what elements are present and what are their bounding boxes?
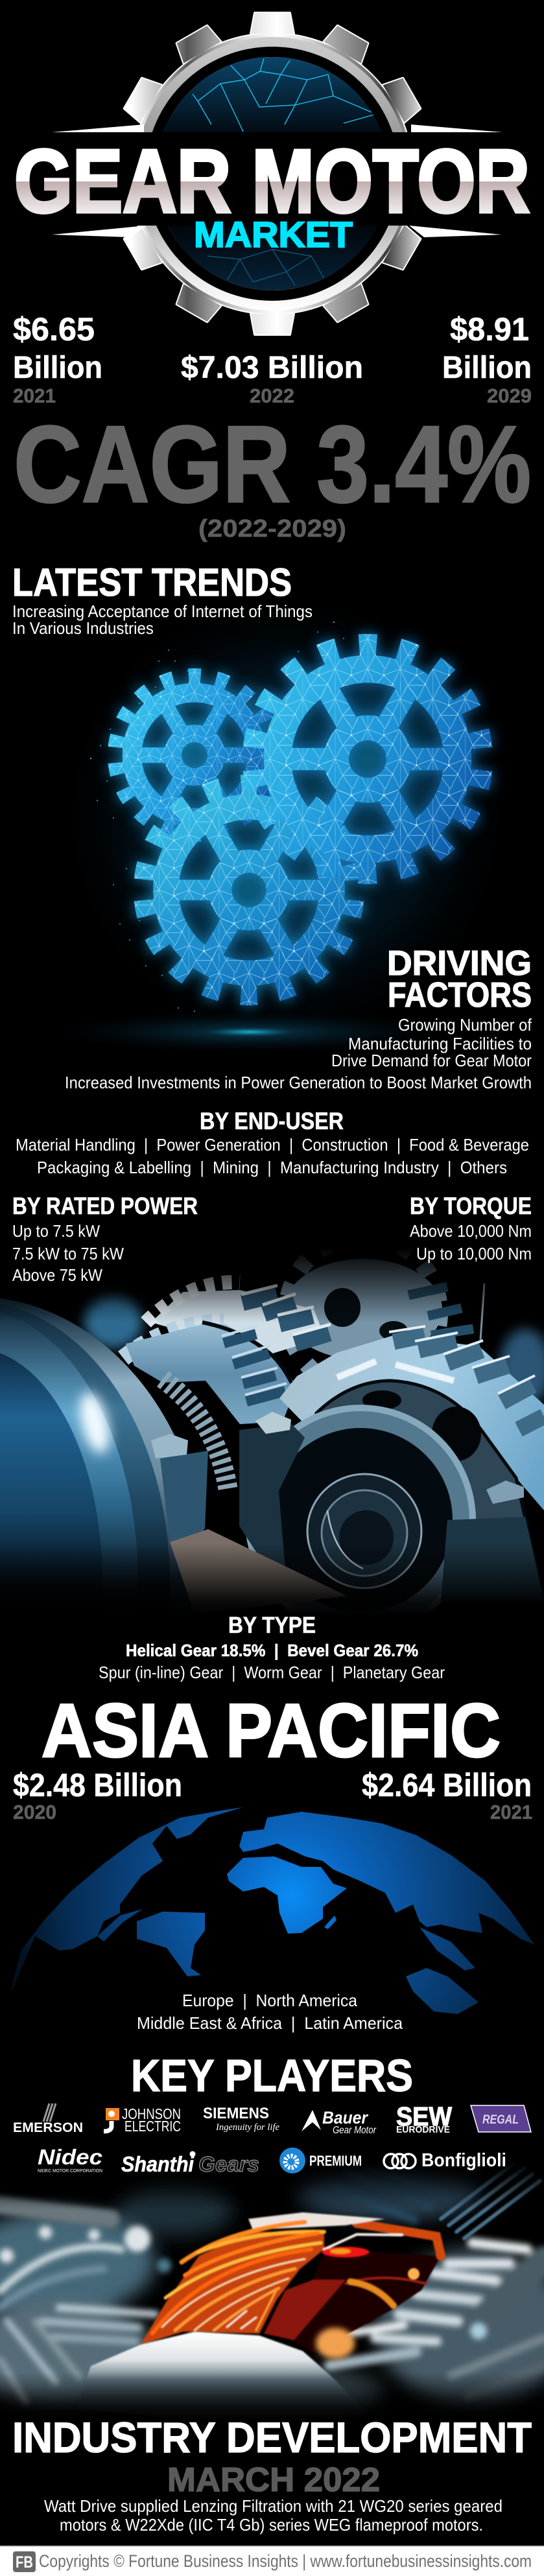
list: leading gear types: Helical Gear 18.5% | Bevel Gear 26.7% (126, 1641, 418, 1660)
logo: Johnson Electric: JOHNSON (122, 2105, 181, 2122)
logo: Nidec: Nidec (38, 2145, 102, 2169)
list: other gear types: Spur (in-line) Gear | Worm Gear | Planetary Gear (99, 1663, 445, 1682)
text: development detail: motors & W22Xde (IIC T4 Gb) series WEG flameproof motors. (60, 2515, 483, 2535)
logo: Shanthi Gears: Gears (198, 2152, 259, 2176)
heading: By Type: BY TYPE (228, 1613, 316, 1638)
list: rated power segments: Up to 7.5 kW (12, 1221, 100, 1241)
stat: Asia Pacific 2020: $2.48 Billion (13, 1767, 182, 1803)
list: torque segments: Up to 10,000 Nm (416, 1244, 532, 1263)
logo: Johnson Electric: ELECTRIC (124, 2118, 181, 2135)
main gear band and teeth (279, 1325, 544, 1567)
list: other regions: Europe | North America (182, 1991, 358, 2010)
motor housing highlight (87, 2331, 348, 2413)
back row of mid gear teeth (146, 1282, 331, 1355)
list: rated power segments: Above 75 kW (12, 1265, 102, 1285)
heading: Asia Pacific: ASIA PACIFIC (41, 1688, 501, 1773)
gear large (253, 644, 482, 874)
heading: By Rated Power: BY RATED POWER (12, 1193, 198, 1219)
logo: Johnson Electric (104, 2105, 181, 2135)
subtitle: Market: MARKET (194, 214, 353, 255)
heading: Latest Trends: LATEST TRENDS (12, 561, 292, 604)
text: latest trends detail (12, 602, 313, 638)
list: end-user segments: Packaging & Labelling | Mining | Manufacturing Industry | Others (37, 1158, 507, 1177)
stat: 2021 value: $6.65 (13, 311, 95, 347)
floor light (55, 1011, 444, 1053)
logo: Premium (279, 2148, 362, 2173)
gear bottom (143, 784, 355, 996)
logo: Regal: REGAL (482, 2113, 519, 2127)
housing and bearing (239, 1405, 543, 1609)
stat: 2022 value: $7.03 Billion (181, 351, 363, 385)
front mid gear (123, 1322, 297, 1424)
coil windings (141, 2212, 441, 2353)
map: globe (10, 1807, 534, 2014)
rear gear (280, 1252, 485, 1373)
logo: Regal (471, 2105, 531, 2132)
logo: Emerson: EMERSON (13, 2120, 83, 2135)
stat: Asia Pacific 2021 (362, 1767, 532, 1823)
blurred background (84, 1296, 544, 1407)
heading: Driving Factors: DRIVING (387, 944, 532, 983)
logo: Bauer Gear Motor: Gear Motor (333, 2125, 377, 2136)
stat: Asia Pacific 2020: 2020 (13, 1801, 56, 1823)
logo: Siemens: SIEMENS (203, 2105, 269, 2122)
list: rated power segments (12, 1221, 124, 1285)
list: other regions (137, 1991, 403, 2033)
stat: 2022 value: 2022 (250, 384, 294, 407)
text: latest trends detail: In Various Industries (12, 618, 154, 638)
CAGR period: (2022-2029) (198, 515, 346, 543)
stat: 2021 value: Billion (13, 351, 102, 385)
text: driving factors detail: Manufacturing Facilities to (348, 1034, 532, 1053)
logo: Shanthi Gears: Shanthi (121, 2152, 195, 2176)
text: driving factors detail: Growing Number of (398, 1015, 532, 1035)
illustration: glowing low-poly gears (55, 596, 506, 1053)
pinion (163, 1379, 228, 1491)
heading: By End-User: BY END-USER (200, 1108, 344, 1134)
stat: 2021 value: 2021 (13, 384, 56, 407)
heading: Driving Factors (387, 944, 532, 1014)
gear small (115, 675, 274, 835)
logo: Bonfiglioli: Bonfiglioli (421, 2150, 506, 2171)
logo emblem: metallic gear (52, 12, 502, 336)
list: torque segments: Above 10,000 Nm (410, 1221, 532, 1241)
text: latest trends detail: Increasing Acceptance of Internet of Things (12, 602, 313, 621)
logo: Siemens: Ingenuity for life (215, 2122, 279, 2133)
drum (0, 1298, 204, 1595)
list: torque segments (410, 1221, 532, 1263)
logo: Premium: PREMIUM (309, 2153, 362, 2169)
logo: Bauer Gear Motor: Bauer (322, 2108, 368, 2127)
stat: 2022 value (181, 351, 363, 407)
stat: Asia Pacific 2020 (13, 1767, 182, 1823)
stat: 2029 value: Billion (442, 351, 532, 385)
image: machinery gears (0, 1252, 544, 1609)
stat: 2029 value: 2029 (487, 384, 532, 407)
stat: 2021 value (13, 311, 102, 407)
logo: Shanthi Gears (121, 2151, 259, 2176)
logo: SEW Eurodrive: SEW (396, 2102, 452, 2131)
stat: 2029 value (442, 311, 532, 407)
text: development detail (44, 2496, 503, 2535)
date: March 2022: MARCH 2022 (167, 2461, 380, 2499)
list: rated power segments: 7.5 kW to 75 kW (12, 1244, 124, 1263)
logo: Siemens (203, 2105, 279, 2133)
heading: Key Players: KEY PLAYERS (131, 2050, 413, 2101)
logo: Emerson (13, 2103, 83, 2135)
footer logo: FB (16, 2553, 33, 2571)
logo: Bauer Gear Motor (302, 2108, 377, 2136)
list: end-user segments (16, 1135, 529, 1177)
block and beam (151, 1434, 347, 1614)
logo: Bonfiglioli (384, 2150, 506, 2171)
list: other regions: Middle East & Africa | Latin America (137, 2013, 403, 2033)
image: hot motor coil (0, 2161, 544, 2421)
text: development detail: Watt Drive supplied Lenzing Filtration with 21 WG20 series geared (44, 2496, 503, 2516)
text: driving factors detail (65, 1015, 532, 1092)
stat: 2029 value: $8.91 (450, 311, 529, 347)
stat: Asia Pacific 2021: 2021 (490, 1801, 532, 1823)
logo: Nidec: NIDEC MOTOR CORPORATION (38, 2169, 102, 2173)
footer (0, 2546, 544, 2576)
logo: SEW Eurodrive: EURODRIVE (396, 2124, 450, 2135)
